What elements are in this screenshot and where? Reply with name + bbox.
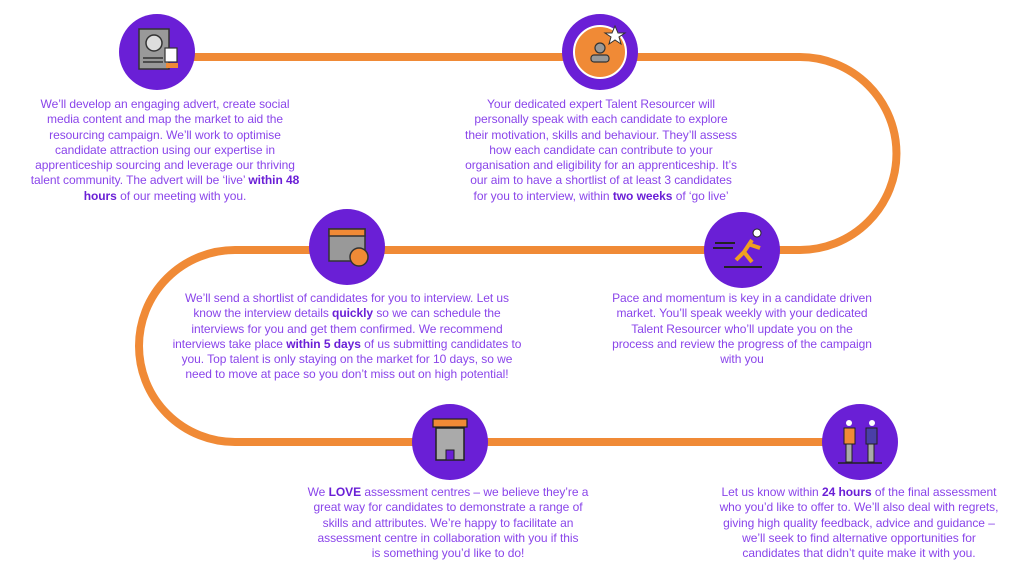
text: step 3 interviews: interviews for you and get them confirmed. We recommend: [191, 322, 503, 336]
text: step 5 assessment centres: assessment centre in collaboration with you if this: [318, 531, 578, 545]
icon: runner: [704, 212, 780, 288]
text: step 4 momentum: market. You’ll speak weekly with your dedicated: [616, 306, 868, 320]
text: step 4 momentum: Pace and momentum is key in a candidate driven: [612, 291, 872, 305]
text: step 1 advert: talent community. The advert will be ‘live’ within 48: [31, 173, 299, 187]
text: step 6 offer: Let us know within 24 hours of the final assessment: [722, 485, 996, 499]
text: step 1 advert: hours of our meeting with you.: [84, 189, 246, 203]
text: step 2 talent resourcer: Your dedicated expert Talent Resourcer will: [487, 97, 715, 111]
text: step 2 talent resourcer: [465, 97, 737, 203]
text: step 6 offer: who you’d like to offer to. We’ll also deal with regrets,: [720, 500, 998, 514]
text: step 4 momentum: Talent Resourcer who’ll update you on the: [631, 322, 853, 336]
orange path: [139, 57, 896, 442]
icon: advert: [119, 14, 195, 90]
text: step 4 momentum: with you: [720, 352, 764, 366]
text: step 5 assessment centres: skills and attributes. We’re happy to facilitate an: [323, 516, 573, 530]
text: step 1 advert: We’ll develop an engaging advert, create social: [41, 97, 289, 111]
text: step 3 interviews: We’ll send a shortlist of candidates for you to interview. Let us: [185, 291, 509, 305]
text: step 1 advert: candidate attraction using our expertise in: [55, 143, 275, 157]
text: step 3 interviews: need to move at pace so you don’t miss out on high potential!: [185, 367, 509, 381]
icon: interview building: [412, 404, 488, 480]
text: step 6 offer: [720, 485, 998, 560]
text: step 6 offer: we’ll seek to find alternative opportunities for: [742, 531, 976, 545]
text: step 3 interviews: [173, 291, 521, 381]
text: step 1 advert: [30, 97, 299, 203]
text: step 1 advert: media content and map the market to aid the: [47, 112, 283, 126]
text: step 2 talent resourcer: for you to interview, within two weeks of ‘go live’: [474, 189, 728, 203]
text: step 2 talent resourcer: how each candidate can contribute to your: [489, 143, 713, 157]
text: step 1 advert: resourcing campaign. We’ll work to optimise: [49, 128, 281, 142]
text: step 6 offer: candidates that didn’t quite make it with you.: [742, 546, 976, 560]
text: step 5 assessment centres: [308, 485, 588, 560]
text: step 2 talent resourcer: their motivation, skills and behaviour. They’ll assess: [465, 128, 737, 142]
text: step 4 momentum: [612, 291, 872, 366]
text: step 2 talent resourcer: our aim to have a shortlist of at least 3 candidates: [470, 173, 732, 187]
text: step 3 interviews: you. Top talent is only staying on the market for 10 days, so we: [182, 352, 512, 366]
icon: handshake: [822, 404, 898, 480]
text: step 2 talent resourcer: personally speak with each candidate to explore: [474, 112, 728, 126]
icon: candidate star: [562, 14, 638, 90]
icon: calendar: [309, 209, 385, 285]
text: step 5 assessment centres: is something you’d like to do!: [372, 546, 524, 560]
text: step 4 momentum: process and review the progress of the campaign: [612, 337, 872, 351]
text: step 2 talent resourcer: organisation and eligibility for an apprenticeship. It’s: [465, 158, 737, 172]
text: step 5 assessment centres: great way for candidates to demonstrate a range of: [314, 500, 582, 514]
text: step 6 offer: giving high quality feedback, advice and guidance –: [723, 516, 995, 530]
text: step 1 advert: apprenticeship sourcing and leverage our thriving: [35, 158, 295, 172]
text: step 3 interviews: know the interview details quickly so we can schedule the: [193, 306, 501, 320]
text: step 5 assessment centres: We LOVE assessment centres – we believe they’re a: [308, 485, 588, 499]
text: step 3 interviews: interviews take place within 5 days of us submitting candidates to: [173, 337, 521, 351]
